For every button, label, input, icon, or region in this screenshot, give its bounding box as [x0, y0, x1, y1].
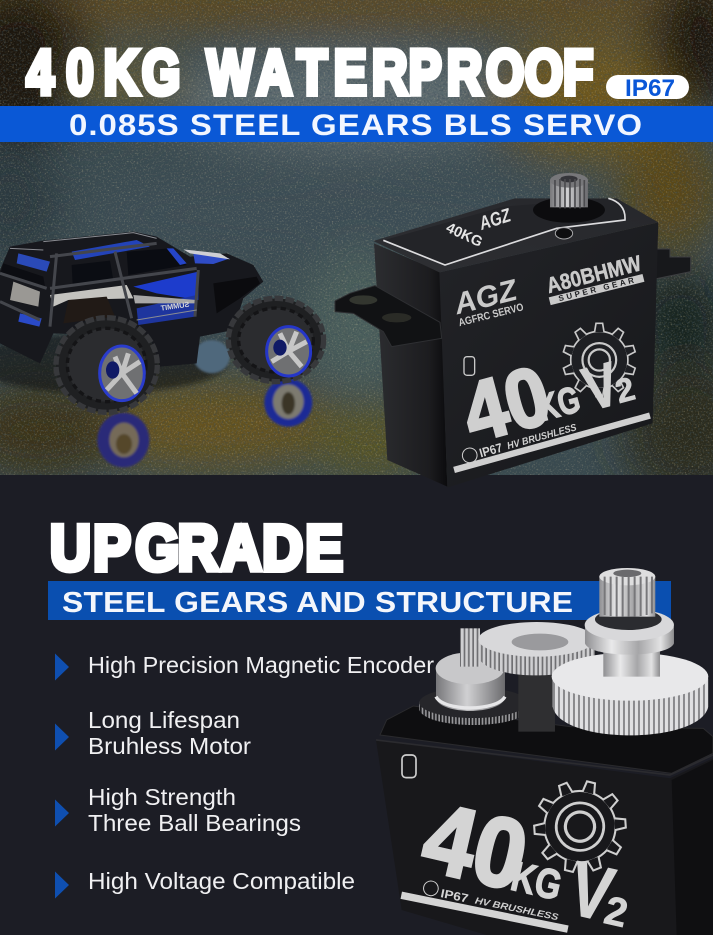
- small outline badge: [402, 755, 416, 778]
- servo body front: [376, 740, 713, 935]
- small outline badge: [464, 357, 475, 375]
- 40 KG V2 mark: KG: [533, 378, 584, 429]
- front wheel: [56, 318, 157, 412]
- feature: ball bearings: Three Ball Bearings: [88, 810, 301, 836]
- 40 KG V2 mark: 2: [612, 371, 639, 411]
- AGFRC logo: AGFRC SERVO: [457, 301, 525, 329]
- top plate with silver edge: AGZ: [476, 205, 514, 235]
- servo rim and top frame: [380, 706, 713, 773]
- servo front face: [439, 222, 658, 488]
- feature: ball bearings: High Strength: [88, 784, 236, 810]
- central dark shaft: [518, 673, 555, 732]
- 40 KG V2 mark: 2: [600, 888, 632, 935]
- small pinion: [460, 628, 480, 667]
- model label A80BHMW: SUPER GEAR: [558, 276, 635, 303]
- top plate with silver edge: [383, 198, 625, 265]
- 40 KG V2 mark: [412, 781, 647, 935]
- feature: high voltage: High Voltage Compatible: [88, 868, 355, 894]
- servo with exposed gears (bottom): [376, 568, 713, 935]
- feature: ball bearings: [55, 784, 301, 836]
- badge: IP67: [606, 75, 689, 102]
- 40 KG V2 mark: V: [576, 349, 626, 425]
- RC truck photo: [0, 232, 324, 467]
- 40 KG V2 mark: 40: [413, 781, 537, 911]
- gear icon: [525, 771, 635, 882]
- gear base disk: [419, 687, 527, 718]
- photo background: wet riverbed: [0, 0, 713, 500]
- truck body panels: [0, 233, 260, 327]
- badge: IP67: IP67: [625, 75, 675, 102]
- blue banner: steel gears: [48, 581, 671, 620]
- water patch: [193, 340, 230, 373]
- 40 KG V2 mark: [453, 326, 642, 460]
- servo top face: [373, 198, 658, 272]
- front wheel reflection: [97, 413, 149, 467]
- silver motor cylinder: [436, 652, 505, 711]
- top plate with silver edge: 40KG: [443, 220, 485, 251]
- dark lower panel: [0, 475, 713, 935]
- IP67 HV brushless strip: HV BRUSHLESS: [474, 896, 560, 922]
- blue banner: steel gears: STEEL GEARS AND STRUCTURE: [62, 586, 573, 619]
- bearing collar: [585, 609, 674, 655]
- feature: brushless motor: Long Lifespan: [88, 707, 240, 733]
- splined output shaft: [599, 568, 655, 617]
- feature: magnetic encoder: High Precision Magnetic Encoder: [88, 652, 434, 678]
- IP67 HV brushless strip: [401, 876, 572, 933]
- output horn and spline: [533, 173, 605, 223]
- right mounting ear: [655, 249, 691, 279]
- left mounting ear: [335, 286, 442, 347]
- blue banner: subtitle: 0.085S STEEL GEARS BLS SERVO: [69, 107, 642, 142]
- rear wheel: [228, 298, 324, 382]
- gear icon: [563, 323, 636, 397]
- IP67 HV brushless strip: HV BRUSHLESS: [506, 422, 578, 452]
- title: 40KG WATERPROOF: 40KG WATERPROOF: [27, 37, 593, 107]
- model label A80BHMW: A80BHMW: [544, 250, 644, 298]
- servo side face: [374, 243, 447, 487]
- output shaft stem: [603, 648, 660, 677]
- servo right face: [672, 760, 713, 935]
- feature: brushless motor: [55, 707, 251, 759]
- big steel gear: [552, 653, 708, 735]
- truck body panels: SUMMIT: [160, 300, 190, 313]
- heading: UPGRADE: UPGRADE: [50, 512, 343, 584]
- black lower gear: [419, 702, 527, 725]
- feature list: [55, 652, 434, 898]
- feature: brushless motor: Bruhless Motor: [88, 733, 251, 759]
- screw: [555, 228, 573, 239]
- rear wheel reflection: [264, 379, 312, 427]
- water shadow under truck: [0, 333, 227, 393]
- servo photo (top): [335, 173, 691, 488]
- IP67 HV brushless strip: IP67: [439, 886, 470, 906]
- 40 KG V2 mark: KG: [507, 852, 566, 909]
- upper steel gear: [478, 622, 595, 675]
- IP67 HV brushless strip: IP67: [478, 441, 504, 460]
- AGFRC logo: AGZ: [450, 273, 522, 321]
- IP67 HV brushless strip: [449, 399, 651, 473]
- 40 KG V2 mark: 40: [453, 348, 559, 460]
- truck chassis: [0, 232, 263, 367]
